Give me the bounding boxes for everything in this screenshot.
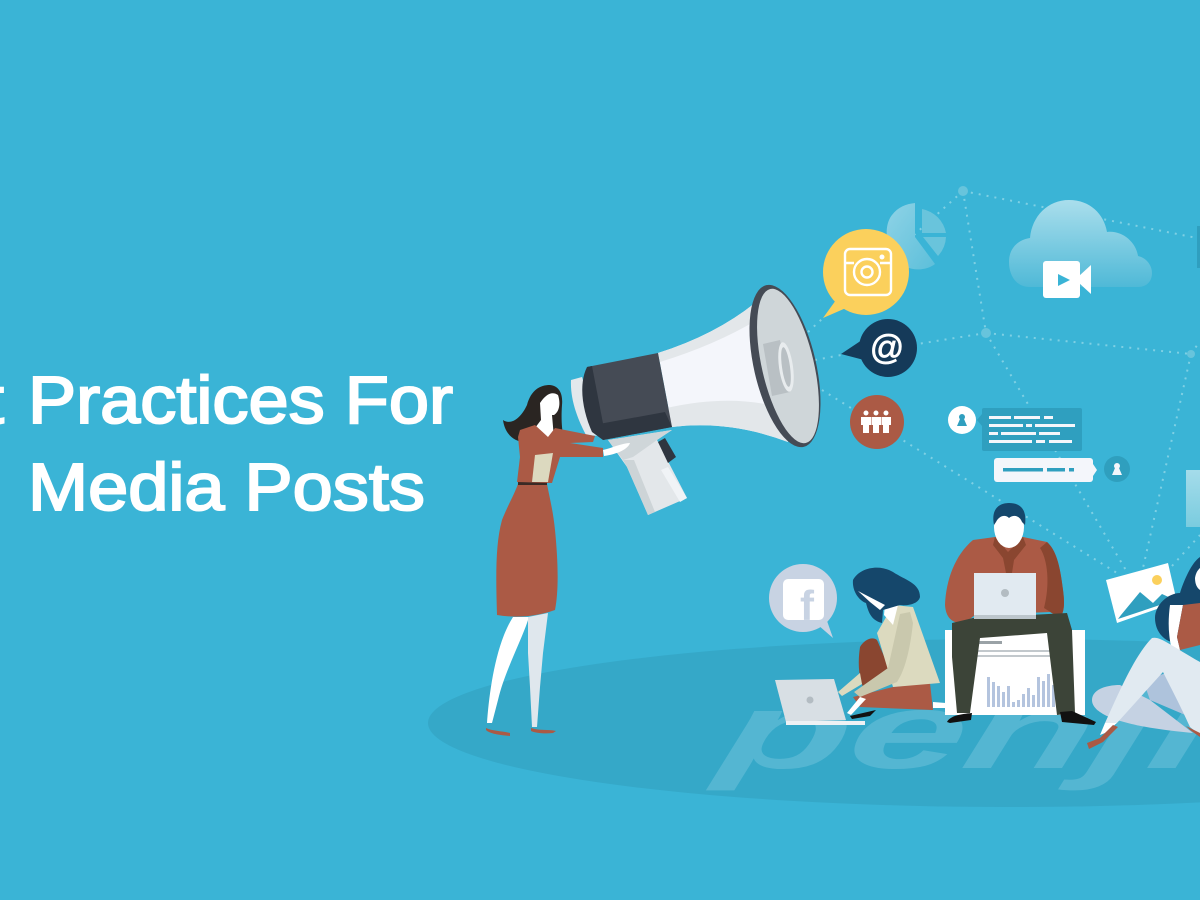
seated woman right [1087, 557, 1200, 749]
report board [945, 630, 1085, 715]
message pill [994, 458, 1097, 482]
photo card [1106, 563, 1177, 623]
title [0, 363, 453, 525]
bubble: people [850, 395, 904, 449]
shoes [486, 728, 510, 736]
legs [1105, 638, 1200, 735]
shoes [947, 713, 972, 723]
network nodes [958, 186, 1195, 358]
pants [952, 613, 1075, 715]
standing woman [486, 385, 630, 736]
bubble: facebook [769, 564, 837, 638]
avatar: white [948, 406, 976, 434]
front arm [854, 612, 913, 697]
network lines [808, 191, 1200, 573]
top-right panel [1197, 226, 1200, 268]
face and neck [535, 393, 559, 438]
body [1177, 603, 1200, 650]
bubble: at sign: @ [870, 329, 904, 367]
torso [1169, 605, 1183, 650]
seated man with laptop [945, 503, 1096, 725]
laptop [974, 573, 1036, 615]
ground ellipse [428, 639, 1200, 807]
bubble: facebook: f [800, 582, 815, 629]
legs [487, 617, 529, 723]
title: Media Posts [28, 450, 425, 525]
shoe [1087, 725, 1118, 749]
right square [1186, 470, 1200, 527]
face [1195, 568, 1200, 590]
hair [853, 568, 920, 623]
neck [884, 603, 898, 625]
raised knee [859, 638, 890, 687]
icon: pie chart [887, 203, 946, 269]
bubble: at sign [841, 319, 917, 377]
seated woman with laptop [775, 568, 946, 725]
skirt [496, 484, 558, 617]
jacket [517, 425, 603, 483]
bubble: instagram [823, 229, 909, 318]
head [994, 506, 1024, 548]
belt [518, 482, 547, 485]
hand [847, 697, 866, 715]
ground cushion [1092, 685, 1193, 733]
avatar: blue [1104, 456, 1130, 482]
back arm [838, 673, 862, 696]
blouse [532, 453, 553, 482]
icon: cloud with video camera [1009, 200, 1152, 298]
chat box [977, 408, 1082, 451]
hair [503, 385, 563, 442]
hair [993, 503, 1025, 525]
sweater [877, 605, 940, 687]
hair [1155, 557, 1200, 643]
laptop [775, 679, 846, 722]
skirt [853, 683, 933, 710]
megaphone [571, 278, 834, 515]
hand [603, 443, 630, 456]
shirt [945, 537, 1064, 623]
title: Practices For [28, 363, 453, 438]
foot [850, 710, 876, 719]
face [858, 591, 885, 610]
foot [1100, 723, 1117, 735]
